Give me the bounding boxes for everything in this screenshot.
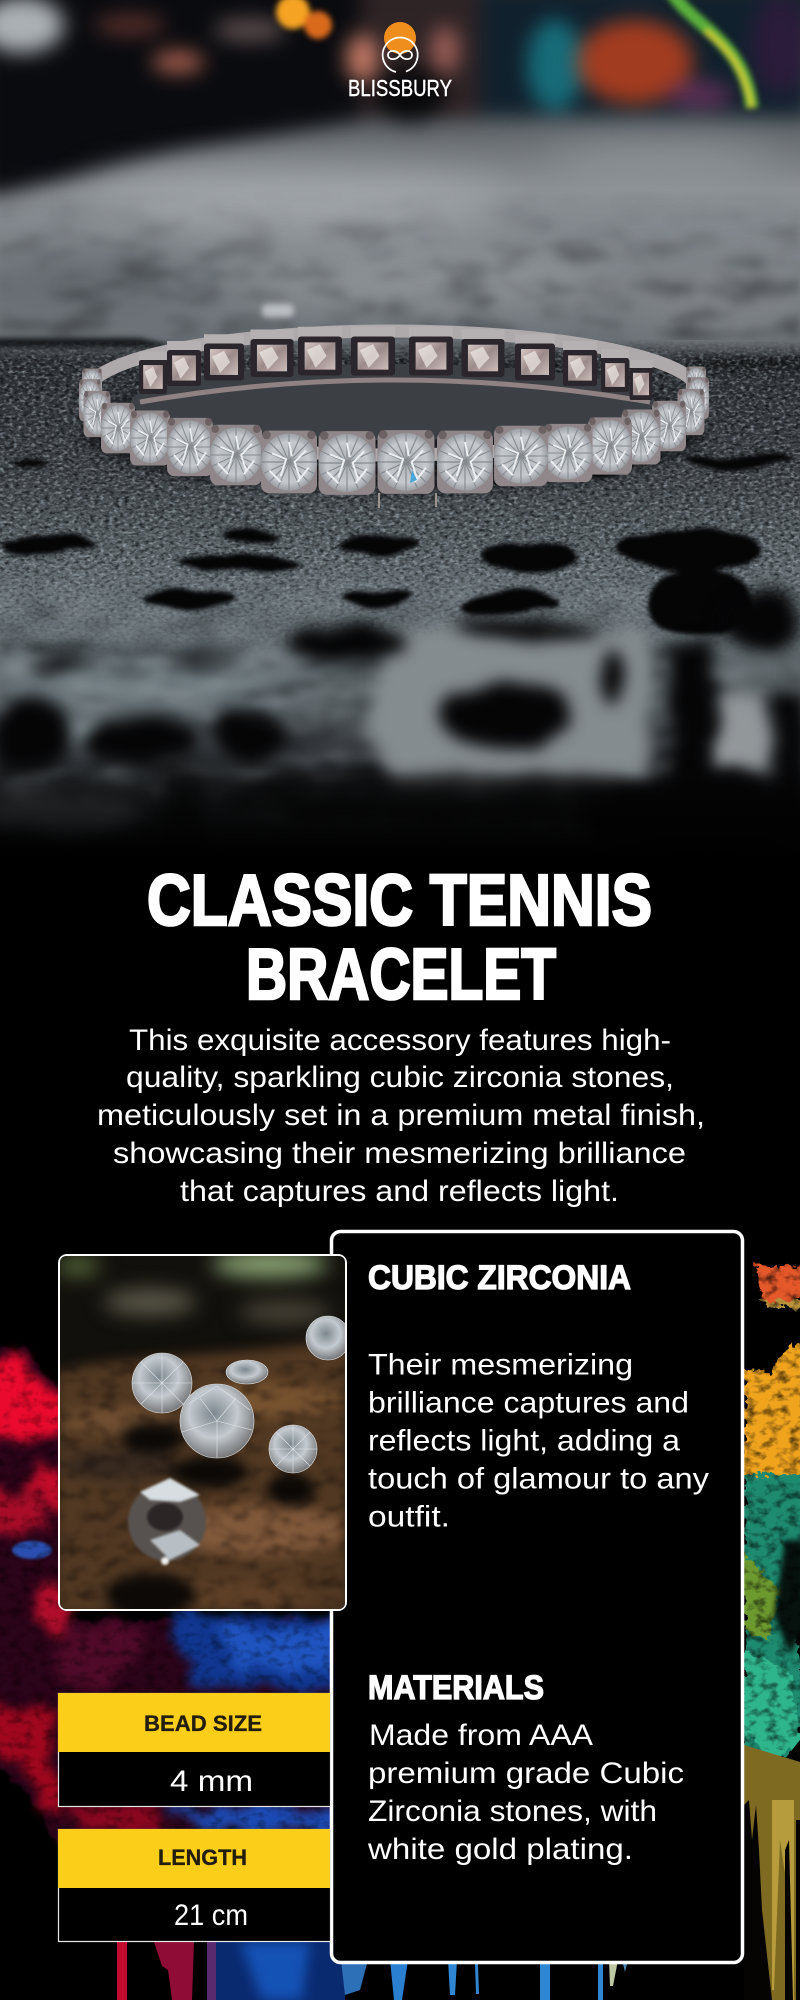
paint texture [0, 1345, 345, 1835]
title [147, 861, 652, 1015]
puddle highlights [0, 630, 768, 833]
spec: bead size: BEAD SIZE [144, 1711, 262, 1736]
soil texture [60, 1360, 345, 1610]
text: cubic zirconia description: touch of glamour to any [368, 1462, 709, 1496]
wet dark patches [0, 455, 795, 637]
spec: length: LENGTH [158, 1845, 247, 1870]
inner floor [131, 364, 655, 440]
text: cubic zirconia description: Their mesmerizing [368, 1348, 633, 1382]
hero photo: bracelet on wet pavement [0, 0, 800, 860]
text: cubic zirconia description [368, 1348, 709, 1534]
description: showcasing their mesmerizing brilliance [113, 1137, 686, 1170]
paint splash: right [744, 1260, 800, 2000]
rear square stones [351, 336, 395, 376]
description: that captures and reflects light. [180, 1175, 619, 1208]
logo [348, 22, 452, 101]
pavement mottling [0, 208, 800, 340]
blurred pavement tones [0, 145, 800, 710]
front stones [261, 431, 317, 493]
paint colour masses [0, 1356, 345, 1830]
inner band [140, 380, 650, 402]
spec: bead size: 4 mm [170, 1765, 253, 1798]
logo infinity [388, 51, 412, 59]
logo wordmark: BLISSBURY [348, 75, 452, 101]
text: materials description: white gold plating. [367, 1833, 633, 1866]
description: quality, sparkling cubic zirconia stones, [126, 1061, 674, 1094]
description: This exquisite accessory features high- [129, 1024, 671, 1057]
text: materials description [367, 1719, 684, 1866]
blue fleck [12, 1541, 52, 1559]
front glint [410, 470, 417, 483]
rear rim [87, 331, 699, 455]
panel: text card [332, 1232, 742, 1962]
text: materials description: Made from AAA [369, 1719, 593, 1752]
asphalt grain [0, 340, 800, 660]
spec: length: 21 cm [174, 1899, 248, 1932]
spec: bead size [58, 1693, 330, 1806]
paint splash: left and bottom [0, 1345, 345, 1880]
spec: length [58, 1829, 330, 1942]
drips under bracelet [379, 493, 436, 508]
blurred street background [0, 0, 800, 195]
title: CLASSIC TENNIS [147, 861, 652, 941]
logo ring [383, 38, 418, 72]
text: cubic zirconia description: outfit. [368, 1500, 450, 1534]
text: cubic zirconia description: brilliance captures and [368, 1386, 689, 1420]
text: materials description: Zirconia stones, with [368, 1795, 657, 1828]
photo card: diamonds on soil [55, 1251, 350, 1617]
paint base [0, 1350, 345, 1880]
text: cubic zirconia description: reflects light, adding a [368, 1424, 681, 1458]
description [97, 1024, 705, 1208]
bracelet [79, 327, 709, 508]
heading: cubic zirconia: CUBIC ZIRCONIA [368, 1259, 631, 1297]
description: meticulously set in a premium metal finish, [97, 1099, 705, 1132]
diamonds [132, 1316, 350, 1473]
ground shadow [81, 368, 705, 492]
heading: materials: MATERIALS [368, 1669, 544, 1707]
text: materials description: premium grade Cubic [368, 1757, 684, 1790]
blurred reflections mottling [0, 578, 800, 796]
bottom drips [117, 1942, 628, 2000]
side stones [82, 368, 102, 391]
logo sun [384, 22, 416, 54]
title: BRACELET [246, 935, 556, 1015]
pavement crack [0, 304, 800, 370]
